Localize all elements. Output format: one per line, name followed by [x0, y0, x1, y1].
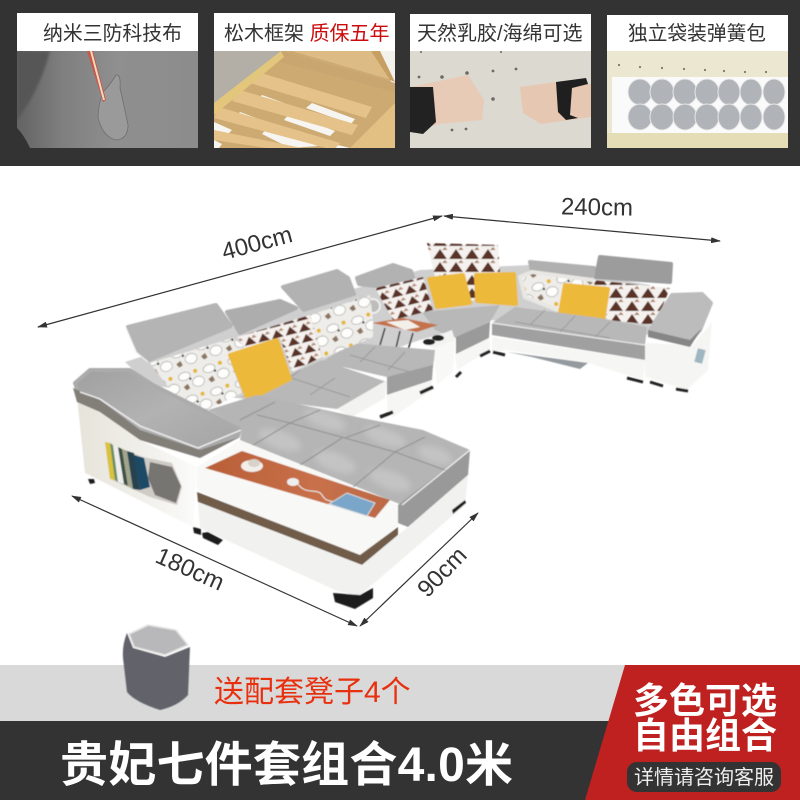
- wood tray: [205, 451, 390, 518]
- panel: colour options: [585, 665, 800, 800]
- yellow pillow: [560, 285, 608, 321]
- panel: pine frame: [214, 13, 395, 150]
- yellow pillow: [476, 274, 516, 304]
- vase: [148, 462, 181, 503]
- label: pine frame with five-year warranty: 松木框架 质保五年: [224, 22, 390, 45]
- left back cushions: [126, 271, 373, 410]
- second seat: [240, 360, 387, 417]
- books: [105, 442, 150, 490]
- floral pillow far: [310, 295, 373, 358]
- cup and saucer: [241, 460, 263, 472]
- white lower body: [198, 475, 468, 597]
- pillow triangles left: [375, 277, 433, 320]
- pillow triangles right: [593, 280, 670, 325]
- multi colour text: 多色可选: [633, 680, 777, 721]
- panel: pocket springs: [607, 15, 788, 148]
- bookshelf: [105, 442, 182, 505]
- floral pillow near: [150, 338, 247, 410]
- dimension labels: 180cm: [151, 542, 228, 596]
- label: pocket springs: 独立袋装弹簧包: [628, 22, 766, 45]
- tablet: [329, 493, 375, 516]
- yellow pillow front: [230, 340, 290, 400]
- headrest 3: [283, 271, 354, 310]
- sofa feet: [88, 479, 466, 609]
- chaise seat: [208, 395, 470, 527]
- headrest small: [530, 262, 594, 276]
- product title: 贵妃七件套组合4.0米: [60, 739, 513, 792]
- dimension labels: 400cm: [219, 221, 295, 266]
- free combination text: 自由组合: [633, 715, 777, 756]
- label: latex or sponge: 天然乳胶/海绵可选: [417, 22, 583, 45]
- pillow triangles back: [427, 243, 500, 302]
- backrest base: [125, 265, 650, 400]
- pillow floral right: [520, 272, 610, 311]
- middle seat: [322, 343, 435, 417]
- dimension arrows: [38, 216, 720, 626]
- stool icon: [123, 625, 190, 710]
- dimension labels: 90cm: [412, 542, 472, 603]
- corner seat: [422, 305, 500, 377]
- headrest large: [596, 257, 671, 282]
- right seat: [492, 307, 663, 386]
- panel: nano fabric: [17, 13, 198, 148]
- top feature band: [0, 0, 800, 166]
- headrest 1: [128, 305, 231, 360]
- speaker disc: [366, 299, 380, 313]
- panel: latex or sponge: [410, 14, 591, 148]
- consult pill: 详情请咨询客服: [634, 766, 774, 789]
- band: gift stool: [0, 665, 800, 721]
- right armrest: [645, 294, 712, 391]
- gift text: 送配套凳子4个: [214, 676, 411, 709]
- yellow pillow near console: [429, 275, 470, 307]
- dimension labels: [151, 193, 633, 603]
- charger and cable: [287, 478, 299, 486]
- consult pill: [627, 762, 781, 792]
- headrest near console: [357, 265, 413, 286]
- band: product name: [0, 721, 800, 800]
- side table: [372, 318, 438, 350]
- headrest 2: [227, 301, 296, 333]
- triangle pillow: [237, 315, 322, 372]
- label: nano fabric: 纳米三防科技布: [43, 22, 182, 45]
- sofa illustration: [73, 243, 712, 609]
- dimension labels: 240cm: [561, 193, 633, 222]
- center console with cup holders: [420, 330, 455, 385]
- right section back: [427, 243, 671, 325]
- arm top: [75, 370, 240, 451]
- brown trim: [197, 492, 398, 565]
- left armrest with bookshelf: [73, 370, 241, 527]
- chaise front with wood tray: [197, 440, 468, 597]
